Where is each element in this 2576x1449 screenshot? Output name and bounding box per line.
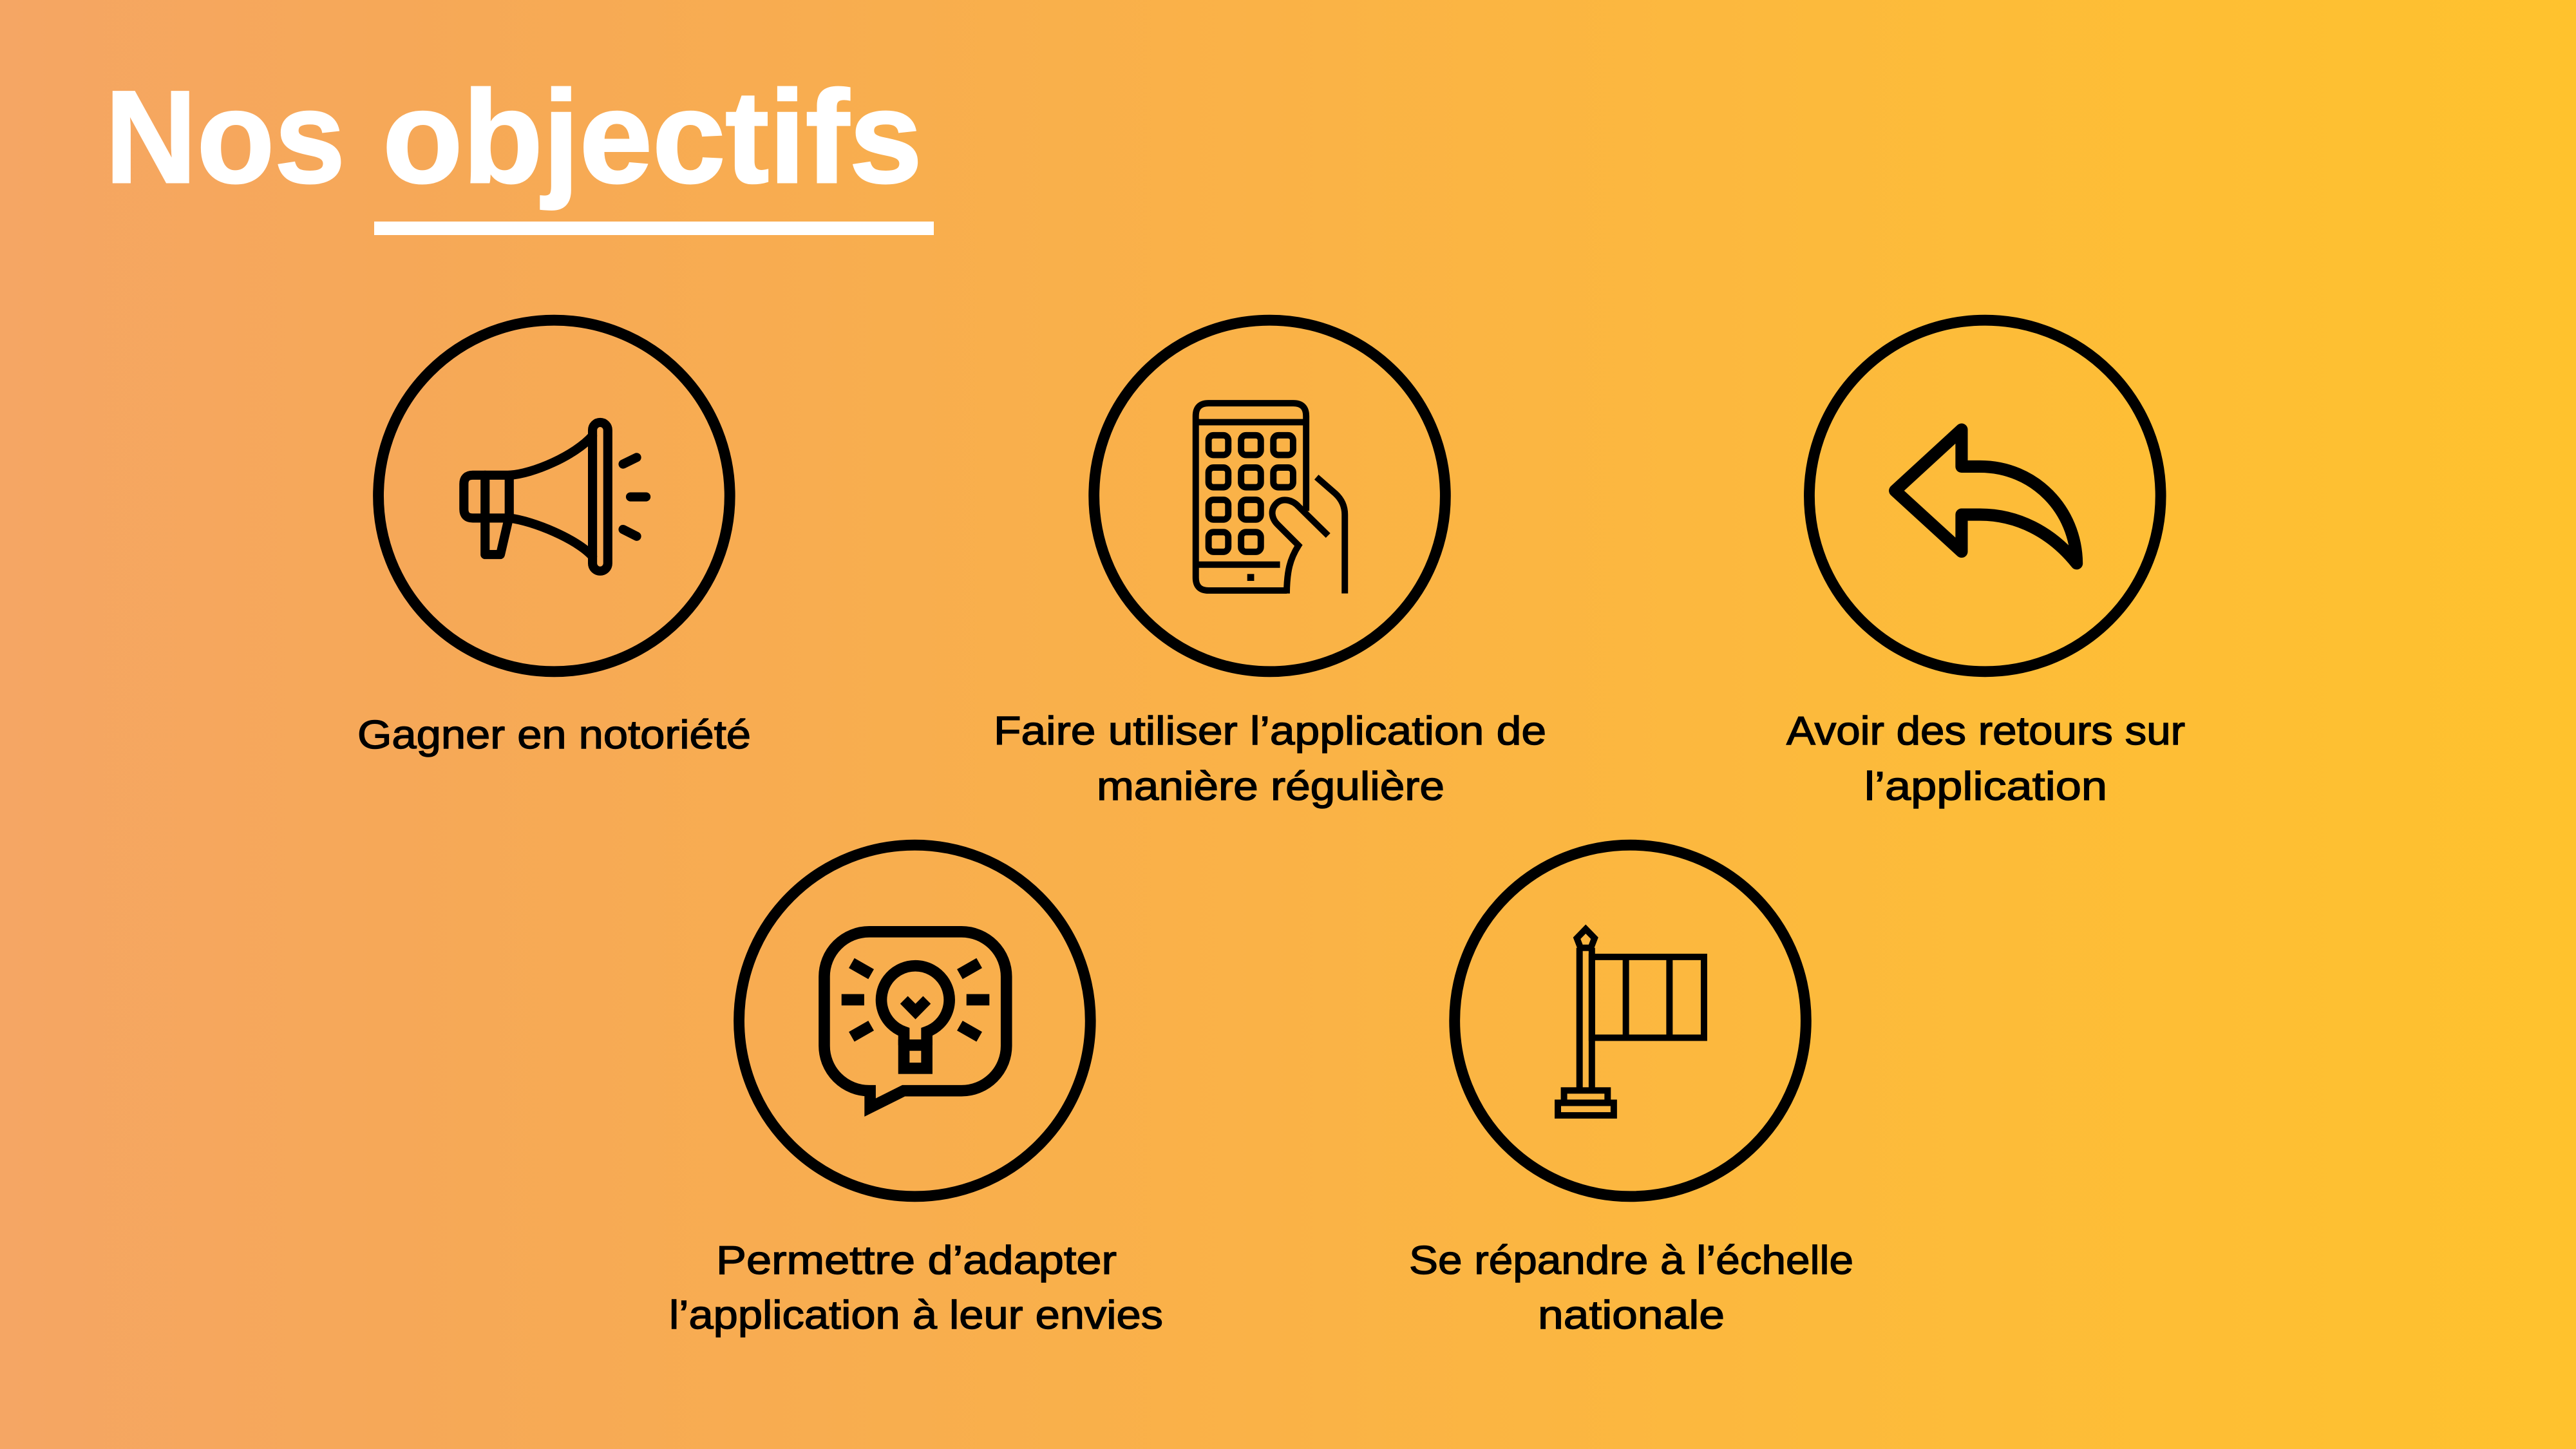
title: Nos objectifs: objectifs bbox=[383, 64, 922, 211]
label: Avoir des retours sur bbox=[1786, 709, 2185, 753]
label: Se répandre à l’échelle bbox=[1409, 1238, 1853, 1283]
label: Permettre d’adapter bbox=[716, 1238, 1117, 1283]
objective 2: Faire utiliser l’application bbox=[994, 320, 1546, 809]
icon: reply arrow in circle bbox=[1809, 320, 2161, 672]
objective 5: Se répandre à l’échelle nationale bbox=[1409, 845, 1853, 1338]
label: l’application à leur envies bbox=[669, 1293, 1163, 1338]
objective 1: Gagner en notoriété bbox=[357, 320, 751, 757]
icon: flag on pole in circle bbox=[1455, 845, 1806, 1197]
label: l’application bbox=[1864, 764, 2107, 809]
icon: light bulb in speech bubble in circle bbox=[739, 845, 1090, 1197]
objective 3: Avoir des retours bbox=[1786, 320, 2185, 809]
label: nationale bbox=[1538, 1293, 1725, 1338]
objective 4: Permettre d’adapter bbox=[669, 845, 1163, 1338]
label: manière régulière bbox=[1097, 764, 1444, 809]
title: Nos objectifs bbox=[105, 64, 934, 235]
label: Faire utiliser l’application de bbox=[994, 709, 1546, 753]
label bbox=[669, 1238, 1163, 1338]
icon: megaphone in circle bbox=[379, 320, 730, 672]
label bbox=[1786, 709, 2185, 809]
title: Nos objectifs: Nos bbox=[105, 64, 345, 211]
label bbox=[1409, 1238, 1853, 1338]
icon: hand holding smartphone in circle bbox=[1094, 320, 1445, 672]
label bbox=[994, 709, 1546, 809]
label: Gagner en notoriété bbox=[357, 713, 751, 757]
